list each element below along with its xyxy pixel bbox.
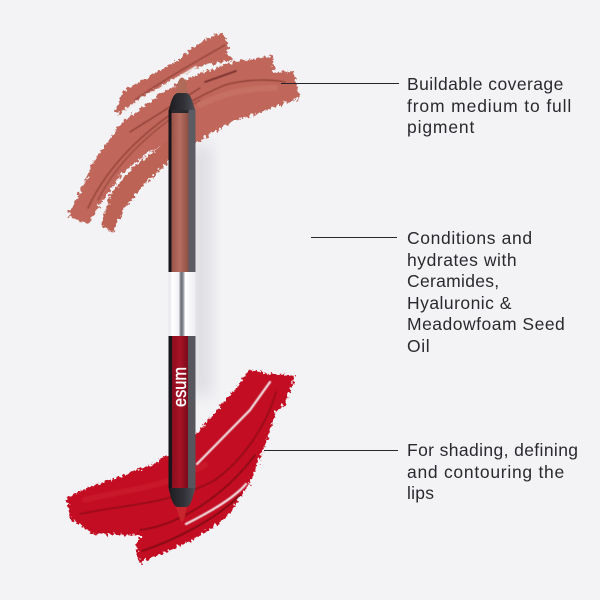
text: conditions: Ceramides, — [407, 271, 499, 291]
silver band — [168, 272, 196, 336]
swatch body: red — [67, 369, 296, 563]
text: shading — [407, 440, 578, 503]
text: shading: For shading, defining — [407, 440, 578, 460]
text: conditions: Hyaluronic & — [407, 292, 512, 312]
text: shading: and contouring the — [407, 462, 565, 482]
text: coverage — [407, 74, 572, 137]
upper barrel — [168, 110, 196, 272]
text: conditions: Oil — [407, 336, 430, 356]
leader line 2 — [311, 237, 397, 238]
text: coverage: pigment — [407, 117, 475, 137]
text: shading: lips — [407, 483, 434, 503]
text: conditions: hydrates with — [407, 250, 517, 270]
text: conditions: Meadowfoam Seed — [407, 314, 565, 334]
pencil shadow — [192, 145, 210, 395]
swatch: nude pink — [68, 32, 300, 232]
leader line 3 — [264, 450, 398, 451]
text: coverage: from medium to full — [407, 96, 572, 116]
swatch body: nude pink — [68, 32, 300, 232]
top tip — [176, 78, 188, 94]
leader line 1 — [281, 83, 399, 84]
swatch: red — [67, 369, 296, 563]
logo: esum — [170, 367, 190, 407]
text: conditions — [407, 228, 565, 356]
bottom tip — [176, 507, 187, 522]
text: conditions: Conditions and — [407, 228, 533, 248]
lower barrel — [168, 336, 196, 488]
bottom cone — [168, 488, 196, 507]
swatch streaks: nude pink — [88, 45, 285, 208]
top cone — [168, 93, 196, 111]
lip pencil — [168, 78, 196, 522]
text: coverage: Buildable coverage — [407, 74, 564, 94]
swatch gaps and streaks: red — [80, 382, 276, 551]
